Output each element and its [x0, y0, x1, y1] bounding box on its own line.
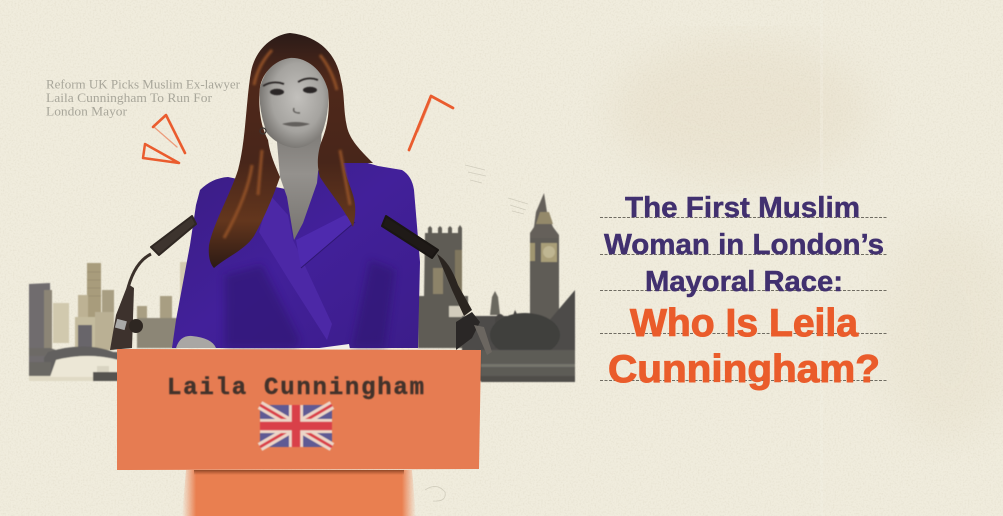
London skyline: left — [29, 262, 189, 381]
earring — [260, 128, 266, 134]
hair highlight strands — [224, 50, 350, 238]
paper sheet — [312, 344, 350, 349]
podium stem — [182, 470, 416, 516]
title purple lines — [604, 192, 884, 298]
icon: union jack flag — [260, 405, 332, 447]
headline snippet: Reform UK Picks Muslim Ex-lawyer — [46, 78, 241, 92]
London skyline: right with Big Ben — [418, 193, 575, 382]
person at podium — [172, 33, 420, 349]
podium — [117, 349, 481, 470]
headline snippet: Laila Cunningham To Run For — [46, 91, 213, 105]
title — [600, 192, 888, 391]
microphone: right — [382, 216, 492, 355]
hand — [176, 336, 216, 348]
microphone: left — [110, 216, 196, 350]
face — [260, 56, 328, 148]
title orange lines: Who Is Leila — [630, 302, 859, 345]
title orange lines: Cunningham? — [608, 348, 880, 391]
title orange lines — [608, 302, 880, 391]
icon: left hand-drawn triangle marks — [143, 115, 185, 163]
eyes, nose, mouth — [263, 78, 318, 126]
jacket shadows — [225, 260, 395, 348]
title purple lines: Woman in London’s — [604, 229, 884, 261]
headline snippet: London Mayor — [46, 104, 128, 118]
headline snippet — [46, 78, 241, 118]
title purple lines: Mayoral Race: — [645, 266, 843, 298]
title purple lines: The First Muslim — [625, 192, 860, 224]
neck and chest — [276, 130, 322, 240]
jacket — [172, 155, 420, 348]
ruled dotted lines — [600, 218, 888, 380]
icon: right hand-drawn triangle mark — [409, 96, 453, 150]
podium name: Laila Cunningham — [167, 375, 424, 402]
hair — [209, 33, 373, 268]
jacket lapels — [259, 195, 332, 340]
faint doodles near skyline — [425, 165, 528, 501]
